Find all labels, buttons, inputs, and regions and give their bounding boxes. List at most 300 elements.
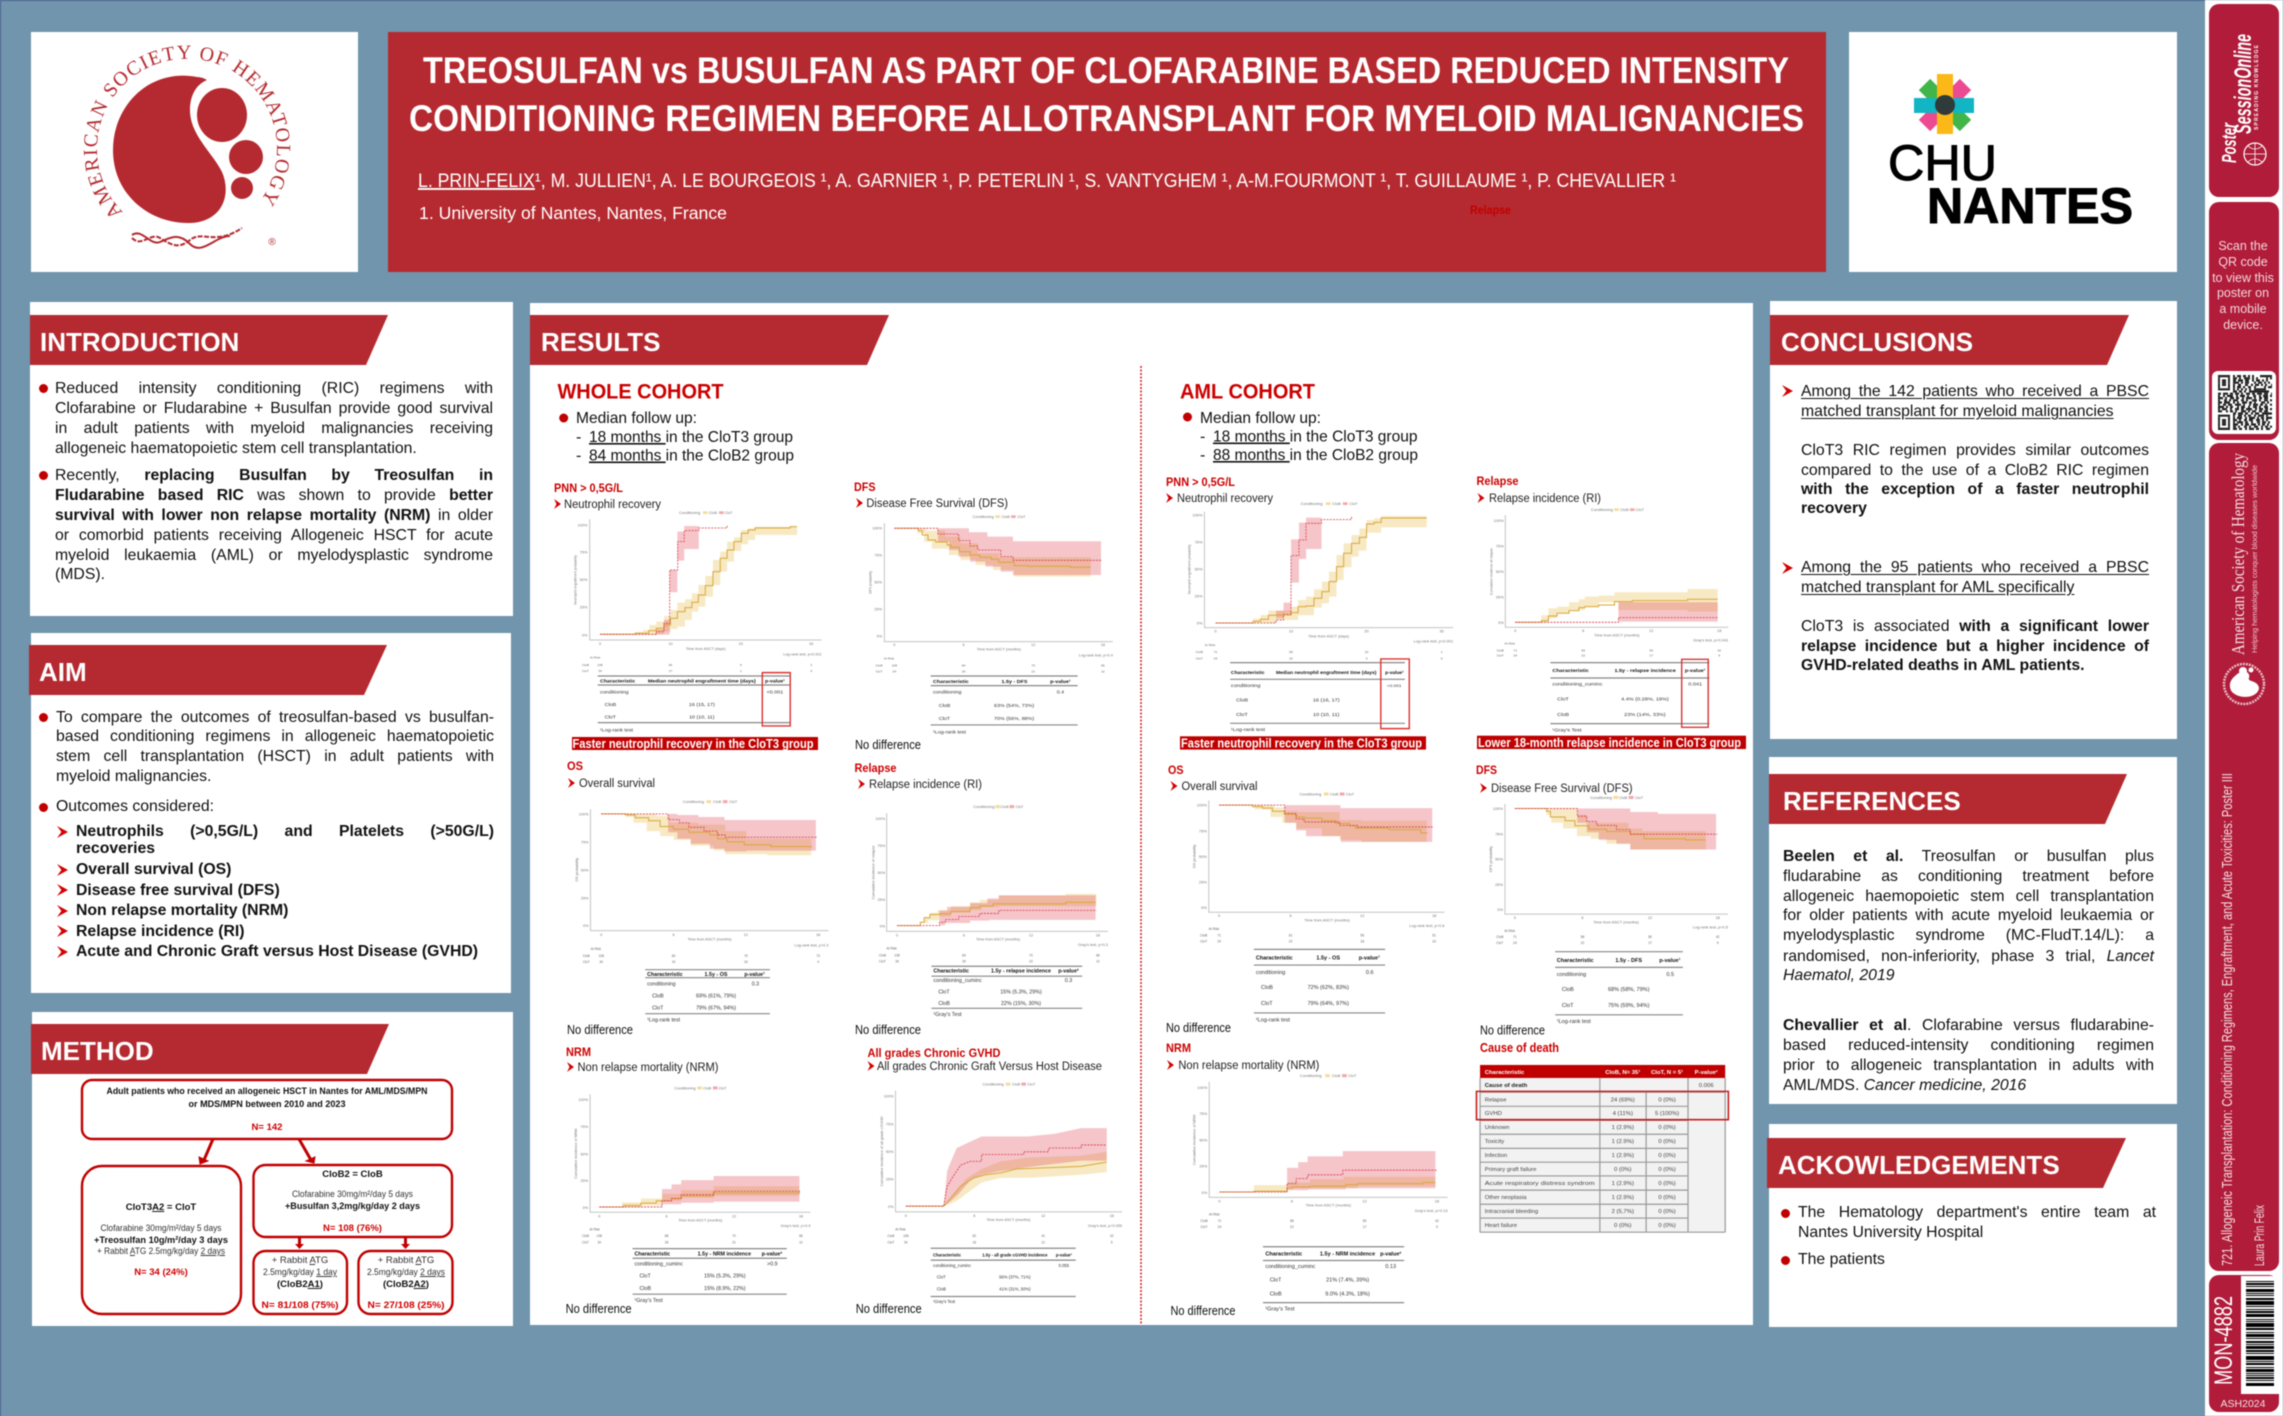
axes: Log-rank test, p=0.3	[794, 943, 829, 947]
table: AML NRM: Characteristic	[1265, 1252, 1302, 1258]
numbers at risk: 71	[1214, 650, 1218, 654]
chart: whole cohort OS	[575, 800, 829, 964]
legend: Conditioning	[1300, 1073, 1322, 1078]
legend: CloB	[1332, 502, 1341, 506]
table: AML relapse: 23% (14%, 33%)	[1624, 712, 1666, 718]
aim text: stem cell transplantation (HSCT) in adult patients with	[56, 748, 494, 765]
numbers at risk: 0	[1441, 657, 1443, 660]
legend	[973, 515, 1026, 519]
heading: cause of death: Cause of death	[1480, 1041, 1559, 1055]
numbers at risk: 22	[1581, 941, 1584, 945]
table: whole cohort neutrophil engraftment: Characteristic	[600, 679, 635, 684]
text: whole cohort median follow up: Median follow up:	[576, 410, 697, 427]
table: AML OS: conditioning	[1256, 970, 1285, 976]
table: whole cohort chronic GVHD: ¹Gray's Test	[933, 1299, 956, 1304]
legend	[1590, 795, 1644, 800]
conclusions text: matched transplant for myeloid malignancies	[1801, 403, 2114, 420]
table: whole cohort neutrophil engraftment: CloB	[605, 702, 617, 708]
axes	[1187, 512, 1453, 644]
registered mark: ®	[268, 237, 276, 248]
legend	[683, 800, 738, 804]
table: AML DFS: 75% (59%, 94%)	[1608, 1003, 1650, 1009]
heading: PNN whole cohort: Neutrophil recovery	[564, 499, 661, 511]
panel: CHU Nantes logo	[1849, 32, 2177, 272]
text: AML cohort median follow up: 18 months in the CloT3 group	[1213, 428, 1418, 446]
numbers at risk: 34	[893, 670, 896, 674]
axes: Time from ASCT (months)	[976, 938, 1021, 942]
table: cause of death: Heart failure	[1485, 1223, 1517, 1229]
axes: Time from ASCT (months)	[977, 648, 1021, 652]
table: cause of death: 0 (0%)	[1658, 1181, 1676, 1187]
numbers at risk	[1196, 643, 1443, 660]
table: whole cohort NRM: conditioning_cuminc	[634, 1261, 683, 1267]
numbers at risk: 108	[598, 954, 604, 958]
box: all patients: or MDS/MPN between 2010 and 2023	[188, 1099, 346, 1110]
aim text: Relapse incidence (RI)	[76, 923, 245, 940]
legend: CloT	[1348, 1073, 1357, 1078]
references text: AML/MDS. Cancer medicine, 2016	[1783, 1077, 2026, 1094]
aim text: Overall survival (OS)	[76, 861, 231, 878]
box: CloB2A1: (CloB2A1)	[277, 1279, 323, 1290]
numbers at risk: CloB	[1200, 1219, 1208, 1223]
axes: 12	[732, 1214, 736, 1218]
numbers at risk: 3	[1366, 657, 1368, 660]
table: cause of death: 1 (2.9%)	[1612, 1195, 1634, 1201]
numbers at risk: 9	[1718, 654, 1720, 658]
table: AML OS: 0.6	[1366, 970, 1374, 976]
numbers at risk: CloB	[1200, 933, 1208, 937]
table: whole cohort NRM: 15% (5.3%, 29%)	[704, 1274, 746, 1280]
numbers at risk: CloT	[887, 1241, 894, 1245]
introduction text	[38, 380, 494, 584]
box: all patients	[82, 1080, 452, 1139]
axes: 18	[1101, 643, 1105, 647]
heading: OS AML cohort: OS	[1168, 763, 1184, 777]
heading: PNN whole cohort: PNN > 0,5G/L	[554, 481, 623, 495]
numbers at risk: 70	[732, 1234, 736, 1238]
axes: 6	[963, 643, 965, 647]
axes: 75%	[581, 840, 589, 844]
numbers at risk: 108	[894, 953, 900, 957]
numbers at risk: 70	[1029, 953, 1033, 957]
table: cause of death: Cause of death	[1485, 1083, 1528, 1089]
heading: OS AML cohort: Overall survival	[1182, 781, 1258, 793]
text: whole cohort median follow up: 84 months in the CloB2 group	[589, 448, 794, 464]
axes: 0%	[1498, 621, 1505, 625]
references text: myelodysplastic syndrome (MC-FludT.14/L): a	[1783, 927, 2154, 944]
text: AML cohort median follow up: Median follow up:	[1200, 410, 1321, 427]
table: AML DFS: 1.5y - DFS	[1615, 958, 1642, 964]
conclusions text: CloT3 RIC regimen provides similar outcomes	[1801, 442, 2149, 459]
axes: Time from ASCT (days)	[1308, 635, 1349, 638]
table: whole cohort neutrophil engraftment: <0.001	[767, 690, 783, 695]
chart: AML relapse	[1489, 508, 1728, 658]
axes: 0%	[880, 925, 886, 929]
axes: Time from ASCT (months)	[986, 1218, 1031, 1222]
table: AML OS: 72% (62%, 83%)	[1307, 985, 1349, 991]
references text: Haematol, 2019	[1783, 967, 1895, 984]
axes: 75%	[1199, 828, 1207, 833]
table: AML relapse: ¹Gray's Test	[1552, 728, 1582, 733]
numbers at risk: 34	[597, 1241, 601, 1245]
confidence bands	[944, 1128, 1107, 1207]
heading: AML cohort: AML COHORT	[1180, 380, 1315, 404]
heading: relapse whole cohort: Relapse	[854, 761, 897, 775]
title	[409, 50, 1804, 139]
numbers at risk: 34	[904, 1241, 908, 1245]
table: whole cohort neutrophil engraftment: CloT	[605, 715, 616, 720]
cohort divider	[1140, 366, 1142, 1325]
axes: Log-rank test, p<0.001	[783, 653, 822, 656]
numbers at risk: 17	[669, 669, 673, 673]
text: AML cohort median follow up: 88 months in the CloB2 group	[1213, 447, 1418, 464]
text: AML cohort median follow up: -	[1200, 428, 1205, 446]
confidence bands	[920, 894, 1096, 926]
table: cause of death: Toxicity	[1485, 1139, 1504, 1145]
numbers at risk: At Risk	[887, 946, 897, 950]
numbers at risk: 16	[744, 960, 748, 964]
heading: results	[530, 315, 889, 365]
stray relapse label: Relapse	[1470, 205, 1511, 217]
table: whole cohort DFS: 63% (54%, 73%)	[994, 703, 1035, 709]
table: whole cohort DFS: p-value¹	[1050, 679, 1071, 685]
numbers at risk: 42	[1716, 935, 1720, 939]
society name: American Society of Hematology	[2228, 453, 2248, 655]
box: CloB2A1: + Rabbit ATG	[272, 1255, 328, 1266]
sidebar: QR code prompt	[2209, 202, 2279, 440]
legend: CloT	[1027, 1083, 1036, 1087]
heading: DFS whole cohort: DFS	[854, 480, 876, 494]
text: no difference NRM: No difference	[566, 1302, 632, 1316]
axes: 75%	[580, 551, 588, 555]
table: cause of death: Intracranial bleeding	[1485, 1209, 1538, 1215]
legend: CloB	[713, 800, 722, 804]
sidebar: poster ID and barcode: MON-4882	[2210, 1296, 2238, 1385]
axes: 12	[1649, 629, 1653, 633]
table: AML neutrophil engraftment: CloT	[1236, 712, 1248, 718]
table: AML neutrophil engraftment: Median neutrophil engraftment time (days)	[1276, 670, 1377, 676]
heading: chronic GVHD: All grades Chronic GVHD	[868, 1046, 1001, 1060]
heading: DFS AML cohort	[1476, 763, 1633, 795]
table: cause of death: CloT, N = 5¹	[1651, 1069, 1683, 1076]
numbers at risk: 108	[597, 1234, 602, 1238]
legend: CloT	[725, 511, 734, 515]
axes	[1191, 801, 1444, 928]
axes: 0	[598, 1214, 600, 1218]
axes: 100%	[884, 1094, 894, 1098]
heading: method	[31, 1024, 389, 1074]
conclusions text: Among the 95 patients who received a PBSC	[1801, 559, 2149, 576]
axes: 0	[599, 642, 601, 646]
callout: lower relapse incidence: Lower 18-month relapse incidence in CloT3 group	[1478, 736, 1741, 750]
numbers at risk: 24	[1513, 654, 1517, 658]
chart: AML NRM	[1191, 1073, 1448, 1229]
references text: for older patients with acute myeloid leukaemia or	[1783, 907, 2154, 924]
table: cause of death: Relapse	[1485, 1097, 1507, 1103]
table: cause of death: 0.006	[1699, 1083, 1714, 1089]
legend: CloT	[1015, 805, 1024, 809]
numbers at risk: 71	[1218, 1219, 1222, 1223]
table: whole cohort DFS: 1.5y - DFS	[1002, 679, 1028, 685]
table: whole cohort neutrophil engraftment: 10 (10, 11)	[689, 715, 715, 720]
box: CloB2A2	[358, 1251, 452, 1314]
panel: references	[1769, 757, 2177, 1104]
axes: 25%	[580, 606, 588, 610]
axes: 0	[600, 933, 602, 937]
legend: CloT	[1346, 792, 1355, 797]
numbers at risk: 71	[1513, 935, 1517, 939]
numbers at risk: CloB	[887, 1234, 894, 1238]
table: cause of death: 1 (2.9%)	[1612, 1181, 1634, 1187]
table: whole cohort OS: 0.3	[752, 982, 759, 988]
table: AML DFS: conditioning	[1557, 972, 1586, 978]
heading: PNN whole cohort	[554, 481, 661, 511]
conclusions text: GVHD-related deaths in AML patients.	[1801, 657, 2085, 674]
numbers at risk: CloT	[583, 960, 590, 964]
table: AML neutrophil engraftment: 10 (10, 11)	[1313, 712, 1340, 718]
table: cause of death: 1 (2.9%)	[1612, 1153, 1634, 1159]
numbers at risk: 50	[1649, 649, 1653, 652]
table: whole cohort NRM	[633, 1249, 787, 1304]
legend	[674, 1086, 727, 1090]
axes: Cumulative incidence of NRM	[1191, 1115, 1196, 1165]
chart: whole cohort relapse	[871, 805, 1108, 963]
heading: introduction	[30, 315, 388, 365]
axes: 0%	[582, 634, 588, 637]
legend: CloB	[1002, 515, 1010, 519]
panel: results	[530, 303, 1753, 1325]
axes: Gray's test, p=0.041	[1693, 639, 1728, 643]
aim text: Acute and Chronic Graft versus Host Disease (GVHD)	[76, 943, 478, 960]
table: AML relapse: 1.5y - relapse incidence	[1614, 668, 1676, 674]
conclusions text: matched transplant for AML specifically	[1801, 579, 2074, 596]
table: whole cohort OS: p-value¹	[744, 972, 765, 978]
axes: 50%	[580, 578, 588, 582]
heading: NRM AML cohort	[1166, 1041, 1320, 1072]
axes	[880, 1091, 1122, 1228]
logo wordmark: NANTES	[1927, 178, 2133, 234]
panel: conclusions	[1770, 301, 2177, 739]
references text: based reduced-intensity conditioning regimen	[1783, 1037, 2154, 1054]
numbers at risk: 26	[665, 1241, 669, 1245]
introduction text: in adult patients with myeloid malignancies receiving	[55, 420, 493, 437]
curves	[601, 814, 817, 848]
legend: CloT	[718, 1086, 727, 1090]
table: whole cohort relapse: 22% (15%, 30%)	[1001, 1001, 1041, 1007]
confidence bands	[917, 528, 1101, 577]
curves	[894, 528, 1102, 567]
presenter name: Laura Prin Felix	[2251, 1205, 2267, 1266]
numbers at risk: CloB	[879, 953, 886, 957]
table: whole cohort chronic GVHD: 0.055	[1059, 1263, 1070, 1268]
axes: 100%	[875, 817, 886, 821]
axes: Cumulative incidence of NRM	[574, 1129, 578, 1179]
heading: NRM whole cohort: NRM	[566, 1045, 591, 1059]
session title: 721. Allogeneic Transplantation: Conditioning Regimens, Engraftment, and Acute Toxicities: Poster III	[2220, 773, 2236, 1266]
axes: Neutrophil engraftment probability	[573, 555, 577, 605]
legend	[982, 1083, 1036, 1087]
table: whole cohort neutrophil engraftment: conditioning	[600, 690, 629, 695]
table: whole cohort OS: ¹Log-rank test	[647, 1018, 681, 1024]
axes: Gray's test, p=0.055	[1088, 1224, 1122, 1228]
numbers at risk: 66	[799, 1234, 803, 1238]
numbers at risk	[879, 946, 1100, 963]
authors: L. PRIN-FELIX¹, M. JULLIEN¹, A. LE BOURGEOIS ¹, A. GARNIER ¹, P. PETERLIN ¹, S. VANTYGHEM ¹, A-M.FOURMONT ¹, T. GUILLAUME ¹, P. CHEVALLIER ¹	[418, 171, 1676, 192]
box: CloT3 arm	[82, 1166, 241, 1314]
legend	[1301, 502, 1359, 506]
axes: 25%	[1199, 1164, 1208, 1169]
arrow: to CloB2	[299, 1139, 315, 1163]
curves	[1216, 516, 1427, 623]
numbers at risk: CloT	[876, 670, 883, 674]
legend: CloB	[1012, 1083, 1021, 1087]
numbers at risk: 26	[962, 670, 966, 674]
axes: Time from ASCT (months)	[1305, 1203, 1352, 1208]
axes	[574, 1094, 811, 1228]
table: whole cohort DFS: conditioning	[933, 690, 962, 695]
table: cause of death: 0 (0%)	[1658, 1167, 1676, 1173]
numbers at risk: 22	[1289, 657, 1293, 660]
axes: 50%	[886, 1150, 894, 1154]
numbers at risk: 50	[1648, 935, 1652, 939]
table: AML relapse	[1550, 659, 1709, 733]
axes	[1191, 1082, 1448, 1213]
legend: CloB	[1330, 792, 1339, 797]
box: CloB2A2: (CloB2A2)	[383, 1279, 429, 1290]
arrows: CloB2 subgroups	[295, 1238, 410, 1249]
sidebar: ASH and session info block	[2209, 443, 2279, 1271]
numbers at risk: 1	[1441, 650, 1443, 654]
axes: 100%	[1192, 514, 1203, 518]
numbers at risk: 12	[1096, 959, 1100, 963]
numbers at risk: At Risk	[895, 1227, 906, 1231]
chart: whole cohort neutrophil recovery	[573, 511, 822, 673]
table: cause of death: 0 (0%)	[1658, 1223, 1676, 1229]
legend: Conditioning	[982, 1083, 1004, 1087]
legend: Conditioning	[674, 1086, 696, 1090]
table: cause of death: P-value²	[1695, 1069, 1718, 1076]
sidebar: Poster Session Online badge: SPREADING KNOWLEDGE	[2254, 44, 2260, 130]
table: whole cohort OS: Characteristic	[647, 972, 683, 978]
table: whole cohort chronic GVHD: 1.5y - all grade cGVHD incidence	[982, 1252, 1048, 1257]
confidence bands	[1253, 516, 1427, 623]
table: AML OS: p-value¹	[1359, 956, 1380, 962]
axes: 25%	[1199, 880, 1207, 885]
axes: 25%	[581, 1179, 589, 1183]
numbers at risk: 17	[1648, 941, 1652, 945]
table: whole cohort neutrophil engraftment: 16 (15, 17)	[689, 702, 715, 708]
heading: OS whole cohort: Overall survival	[579, 778, 655, 790]
axes: 50%	[1199, 854, 1207, 859]
sidebar: QR code prompt: QR code	[2218, 255, 2268, 269]
axes	[573, 519, 822, 656]
numbers at risk: 50	[1363, 1219, 1367, 1223]
legend: Conditioning	[1591, 508, 1613, 512]
axes: 50%	[1495, 857, 1504, 862]
numbers at risk: At Risk	[1205, 643, 1216, 647]
numbers at risk	[1200, 1212, 1439, 1229]
icon: ASH cell mark	[113, 76, 263, 248]
text: whole cohort median follow up: 18 months in the CloT3 group	[589, 429, 793, 446]
legend: Conditioning	[1301, 502, 1323, 506]
table: AML relapse: 4.4% (0.28%, 19%)	[1621, 697, 1669, 702]
numbers at risk: 66	[1101, 664, 1105, 668]
axes: 6	[666, 1214, 668, 1218]
numbers at risk: CloT	[1496, 941, 1503, 945]
table: AML NRM: p-value²	[1380, 1252, 1401, 1258]
legend: CloT	[729, 800, 738, 804]
heading: DFS whole cohort	[854, 480, 1008, 510]
legend: CloB	[1620, 508, 1629, 512]
axes: 12	[1029, 933, 1033, 937]
numbers at risk: CloT	[1196, 657, 1203, 660]
table: AML DFS: 0.5	[1666, 972, 1674, 978]
introduction text: Reduced intensity conditioning (RIC) regimens with	[55, 380, 493, 397]
table: AML neutrophil engraftment: <0.001	[1387, 683, 1402, 688]
table: whole cohort neutrophil engraftment: ¹Log-rank test	[600, 728, 634, 733]
axes: 75%	[886, 1122, 894, 1126]
heading: NRM whole cohort: Non relapse mortality (NRM)	[578, 1062, 719, 1074]
aim text: Disease free survival (DFS)	[76, 882, 280, 898]
axes: 12	[1648, 915, 1652, 920]
heading: results: RESULTS	[541, 327, 660, 357]
axes: 18	[799, 1214, 803, 1218]
table: cause of death: 0 (0%)	[1658, 1097, 1676, 1103]
numbers at risk: 9	[740, 663, 742, 667]
table: cause of death: 1 (2.9%)	[1612, 1139, 1634, 1145]
heading: PNN AML cohort	[1166, 475, 1273, 505]
axes: 75%	[874, 554, 883, 558]
numbers at risk	[1200, 927, 1436, 943]
axes: 50%	[878, 871, 886, 875]
heading: OS whole cohort: OS	[567, 759, 583, 773]
legend	[973, 805, 1024, 809]
table: AML relapse: p-value¹	[1685, 668, 1706, 674]
table: whole cohort relapse: conditioning_cuminc	[933, 978, 982, 984]
axes: 100%	[872, 527, 883, 531]
numbers at risk: CloB	[583, 954, 590, 958]
table: AML DFS: CloB	[1562, 987, 1574, 993]
table: whole cohort chronic GVHD	[931, 1248, 1076, 1304]
axes: 100%	[1493, 806, 1504, 811]
curves	[600, 525, 797, 634]
table: cause of death: 4 (11%)	[1613, 1111, 1633, 1117]
logo wordmark: CHU	[1888, 135, 1997, 191]
numbers at risk: CloT	[1201, 1225, 1208, 1229]
table: whole cohort relapse: p-value²	[1058, 968, 1079, 974]
table: AML NRM: 21% (7.4%, 39%)	[1326, 1278, 1369, 1284]
numbers at risk: At Risk	[1504, 642, 1515, 646]
numbers at risk: 0	[810, 669, 813, 673]
table: AML relapse: conditioning_cuminc	[1552, 682, 1603, 687]
numbers at risk: 22	[1581, 654, 1585, 658]
numbers at risk: 58	[1581, 935, 1584, 939]
aim text	[38, 708, 494, 960]
table: whole cohort DFS: 0.4	[1057, 690, 1064, 695]
numbers at risk: 71	[1513, 649, 1517, 652]
references text: Chevallier et al. Clofarabine versus fludarabine-	[1783, 1017, 2154, 1034]
table: cause of death: 0 (0%)	[1658, 1125, 1676, 1131]
axes: 12	[744, 933, 748, 937]
legend: CloT	[1349, 502, 1359, 506]
table: whole cohort NRM: CloB	[639, 1286, 651, 1292]
table: cause of death: 0 (0%)	[1658, 1153, 1676, 1159]
box: CloB2 arm: Clofarabine 30mg/m²/day 5 days	[292, 1189, 413, 1200]
numbers at risk	[1496, 929, 1720, 945]
numbers at risk	[1497, 642, 1721, 658]
axes: 0%	[1497, 907, 1504, 912]
heading: aim	[29, 645, 387, 695]
